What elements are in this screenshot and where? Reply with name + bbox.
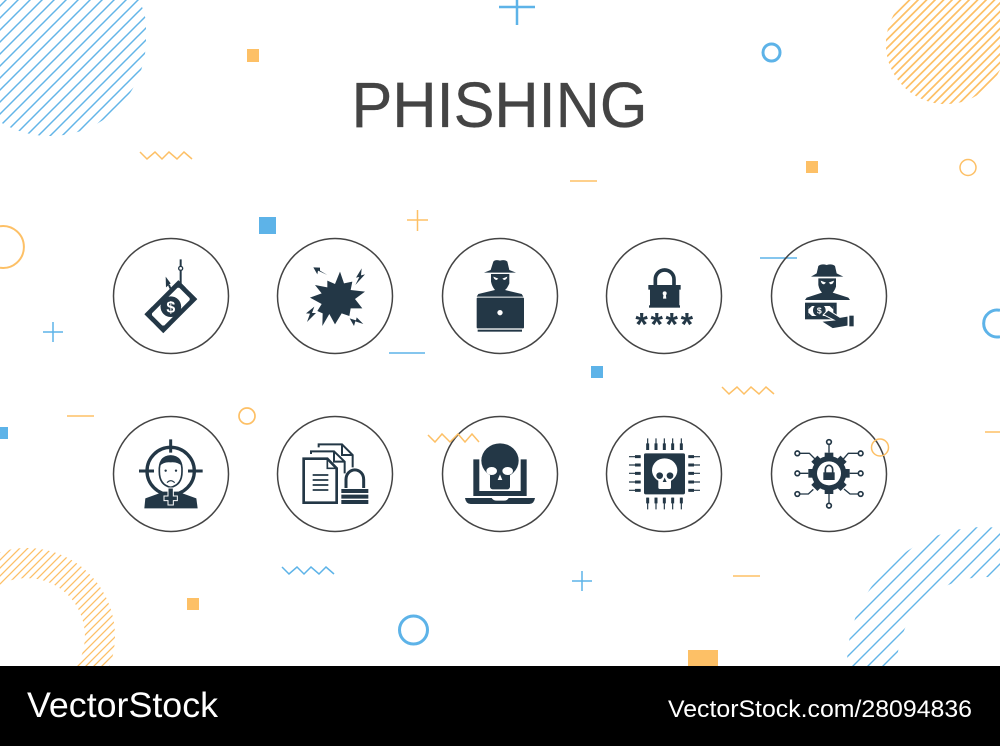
hatched circle: top right <box>886 0 1000 104</box>
icon circle: skull on laptop <box>442 416 558 532</box>
icon circle: password lock <box>606 238 722 354</box>
icon circle: locked documents <box>278 416 392 532</box>
icon circle: explosion <box>278 238 392 354</box>
decorative overlays on circles <box>428 434 888 456</box>
icon: hook <box>166 259 183 292</box>
icon circle: thief taking money: $ <box>817 305 822 315</box>
icon circle: security gear network <box>772 416 886 532</box>
icon circle: thief taking money <box>772 238 886 354</box>
hatched ring: bottom left <box>0 548 115 666</box>
icon circle: hacker with laptop <box>442 238 558 354</box>
footer bar <box>0 666 1000 746</box>
hatched circle: top left <box>0 0 146 136</box>
title: PHISHING <box>352 69 648 141</box>
icon circle: password lock: **** <box>635 306 696 342</box>
hatched ring: bottom right <box>847 527 1000 666</box>
icon circle: money on hook <box>114 238 228 354</box>
footer image id: VectorStock.com/28094836 <box>668 696 972 723</box>
icon circle: skull on chip <box>606 416 722 532</box>
icon: dollar bill: $ <box>166 299 175 316</box>
icon circle: targeted person <box>114 416 228 532</box>
footer brand: VectorStock <box>27 686 219 725</box>
